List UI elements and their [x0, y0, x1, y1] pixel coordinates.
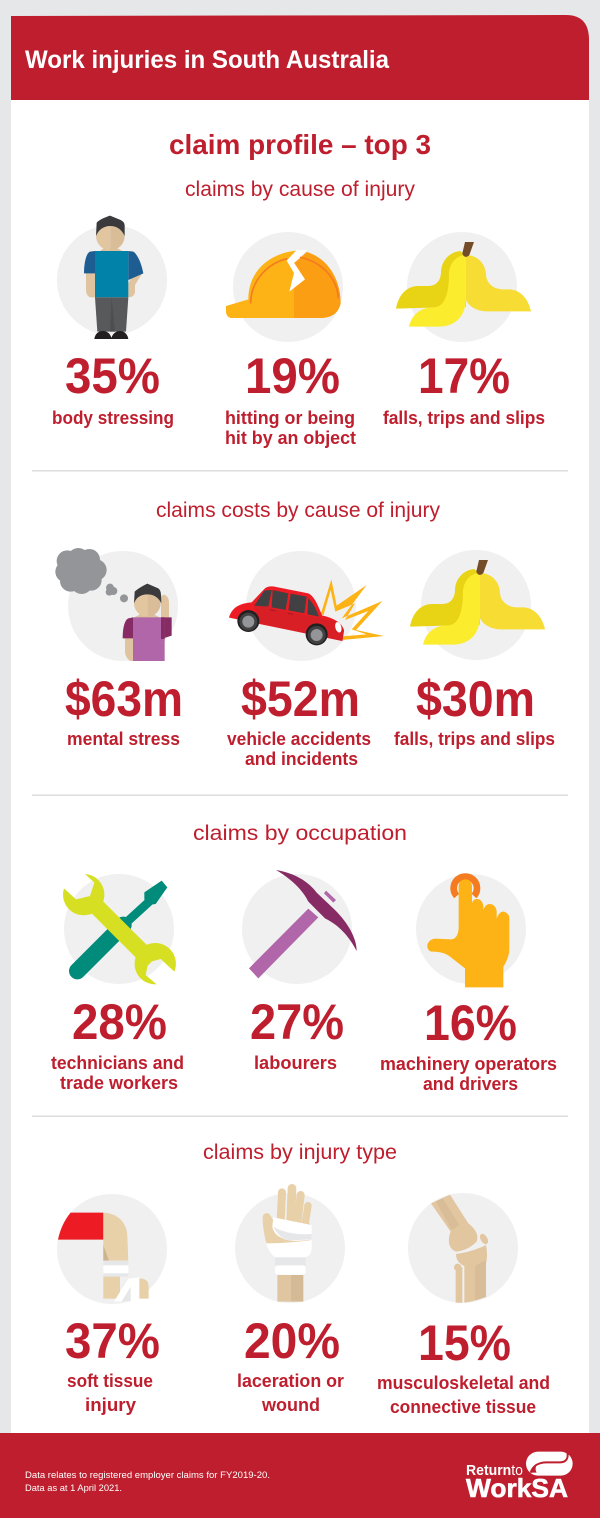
label	[225, 408, 356, 448]
title: Work injuries in South Australia	[25, 46, 390, 74]
stat: laceration or wound	[235, 1188, 345, 1415]
header banner	[11, 15, 589, 100]
value: $52m	[241, 671, 360, 727]
stat: hitting or being hit by an object	[225, 232, 356, 448]
icon: bandaged leg	[57, 1194, 167, 1304]
icon: knee joint	[408, 1193, 518, 1303]
footnote	[25, 1470, 270, 1494]
stat: labourers	[242, 870, 357, 1073]
section: claims by cause of injury	[52, 178, 545, 448]
value: 27%	[250, 994, 344, 1050]
label: and drivers	[423, 1074, 518, 1094]
label: mental stress	[67, 729, 180, 749]
value: 19%	[245, 348, 340, 404]
section heading: claims by injury type	[203, 1141, 397, 1164]
value: 16%	[424, 995, 517, 1051]
label: hit by an object	[225, 428, 356, 448]
label: body stressing	[52, 408, 174, 428]
stat: musculoskeletal and connective tissue	[377, 1193, 550, 1417]
icon: banana peel	[410, 550, 545, 660]
label	[227, 729, 371, 769]
label: trade workers	[60, 1073, 178, 1093]
stat: vehicle accidents and incidents	[227, 551, 384, 769]
label	[377, 1373, 550, 1417]
label	[51, 1053, 184, 1093]
section: claims costs by cause of injury	[55, 499, 555, 769]
label: laceration or	[237, 1371, 344, 1391]
footer	[0, 1433, 600, 1518]
section: claims by injury type	[57, 1141, 550, 1417]
label	[380, 1054, 557, 1094]
label	[67, 1371, 153, 1415]
icon: finger pressing button	[416, 874, 526, 987]
label: injury	[85, 1395, 136, 1415]
logo: Return to WorkSA: WorkSA	[466, 1473, 568, 1503]
section: claims by occupation	[51, 822, 557, 1094]
stat: soft tissue injury	[57, 1194, 167, 1415]
value: 28%	[72, 994, 167, 1050]
icon: bandaged hand	[235, 1188, 345, 1303]
stat: machinery operators and drivers	[380, 874, 557, 1094]
icon: standing person	[57, 216, 167, 339]
label: musculoskeletal and	[377, 1373, 550, 1393]
footnote: Data as at 1 April 2021.	[25, 1483, 122, 1494]
value: 17%	[418, 348, 510, 404]
label: falls, trips and slips	[383, 408, 545, 428]
label: soft tissue	[67, 1371, 153, 1391]
section heading: claims costs by cause of injury	[156, 499, 440, 522]
label: and incidents	[245, 749, 358, 769]
label: vehicle accidents	[227, 729, 371, 749]
label: machinery operators	[380, 1054, 557, 1074]
value: 37%	[65, 1313, 160, 1369]
value: 20%	[244, 1313, 340, 1369]
icon: banana peel	[396, 232, 531, 342]
stat: falls, trips and slips	[383, 232, 545, 428]
value: 35%	[65, 348, 160, 404]
footnote: Data relates to registered employer claims for FY2019-20.	[25, 1470, 270, 1481]
label: labourers	[254, 1053, 337, 1073]
value: $30m	[416, 671, 535, 727]
stat: body stressing	[52, 216, 174, 428]
label: falls, trips and slips	[394, 729, 555, 749]
label: hitting or being	[225, 408, 355, 428]
icon: cracked hard hat	[226, 232, 343, 342]
label: wound	[261, 1395, 320, 1415]
section heading: claims by cause of injury	[185, 178, 415, 201]
value: 15%	[418, 1315, 511, 1371]
icon: person with thought cloud	[55, 548, 178, 661]
label: connective tissue	[390, 1397, 536, 1417]
section heading: claims by occupation	[193, 822, 407, 845]
icon: wrench and screwdriver	[63, 874, 176, 984]
stat: falls, trips and slips cost	[394, 550, 555, 749]
stat: mental stress	[55, 548, 183, 749]
icon: crashed red car	[229, 551, 384, 661]
label	[237, 1371, 344, 1415]
icon: pickaxe	[242, 870, 357, 984]
main heading: claim profile – top 3	[169, 129, 431, 160]
label: technicians and	[51, 1053, 184, 1073]
value: $63m	[65, 671, 183, 727]
logo: Return to WorkSA	[466, 1452, 573, 1503]
logo: Return to WorkSA: Returnto	[466, 1462, 523, 1479]
stat: technicians and trade workers	[51, 874, 184, 1093]
